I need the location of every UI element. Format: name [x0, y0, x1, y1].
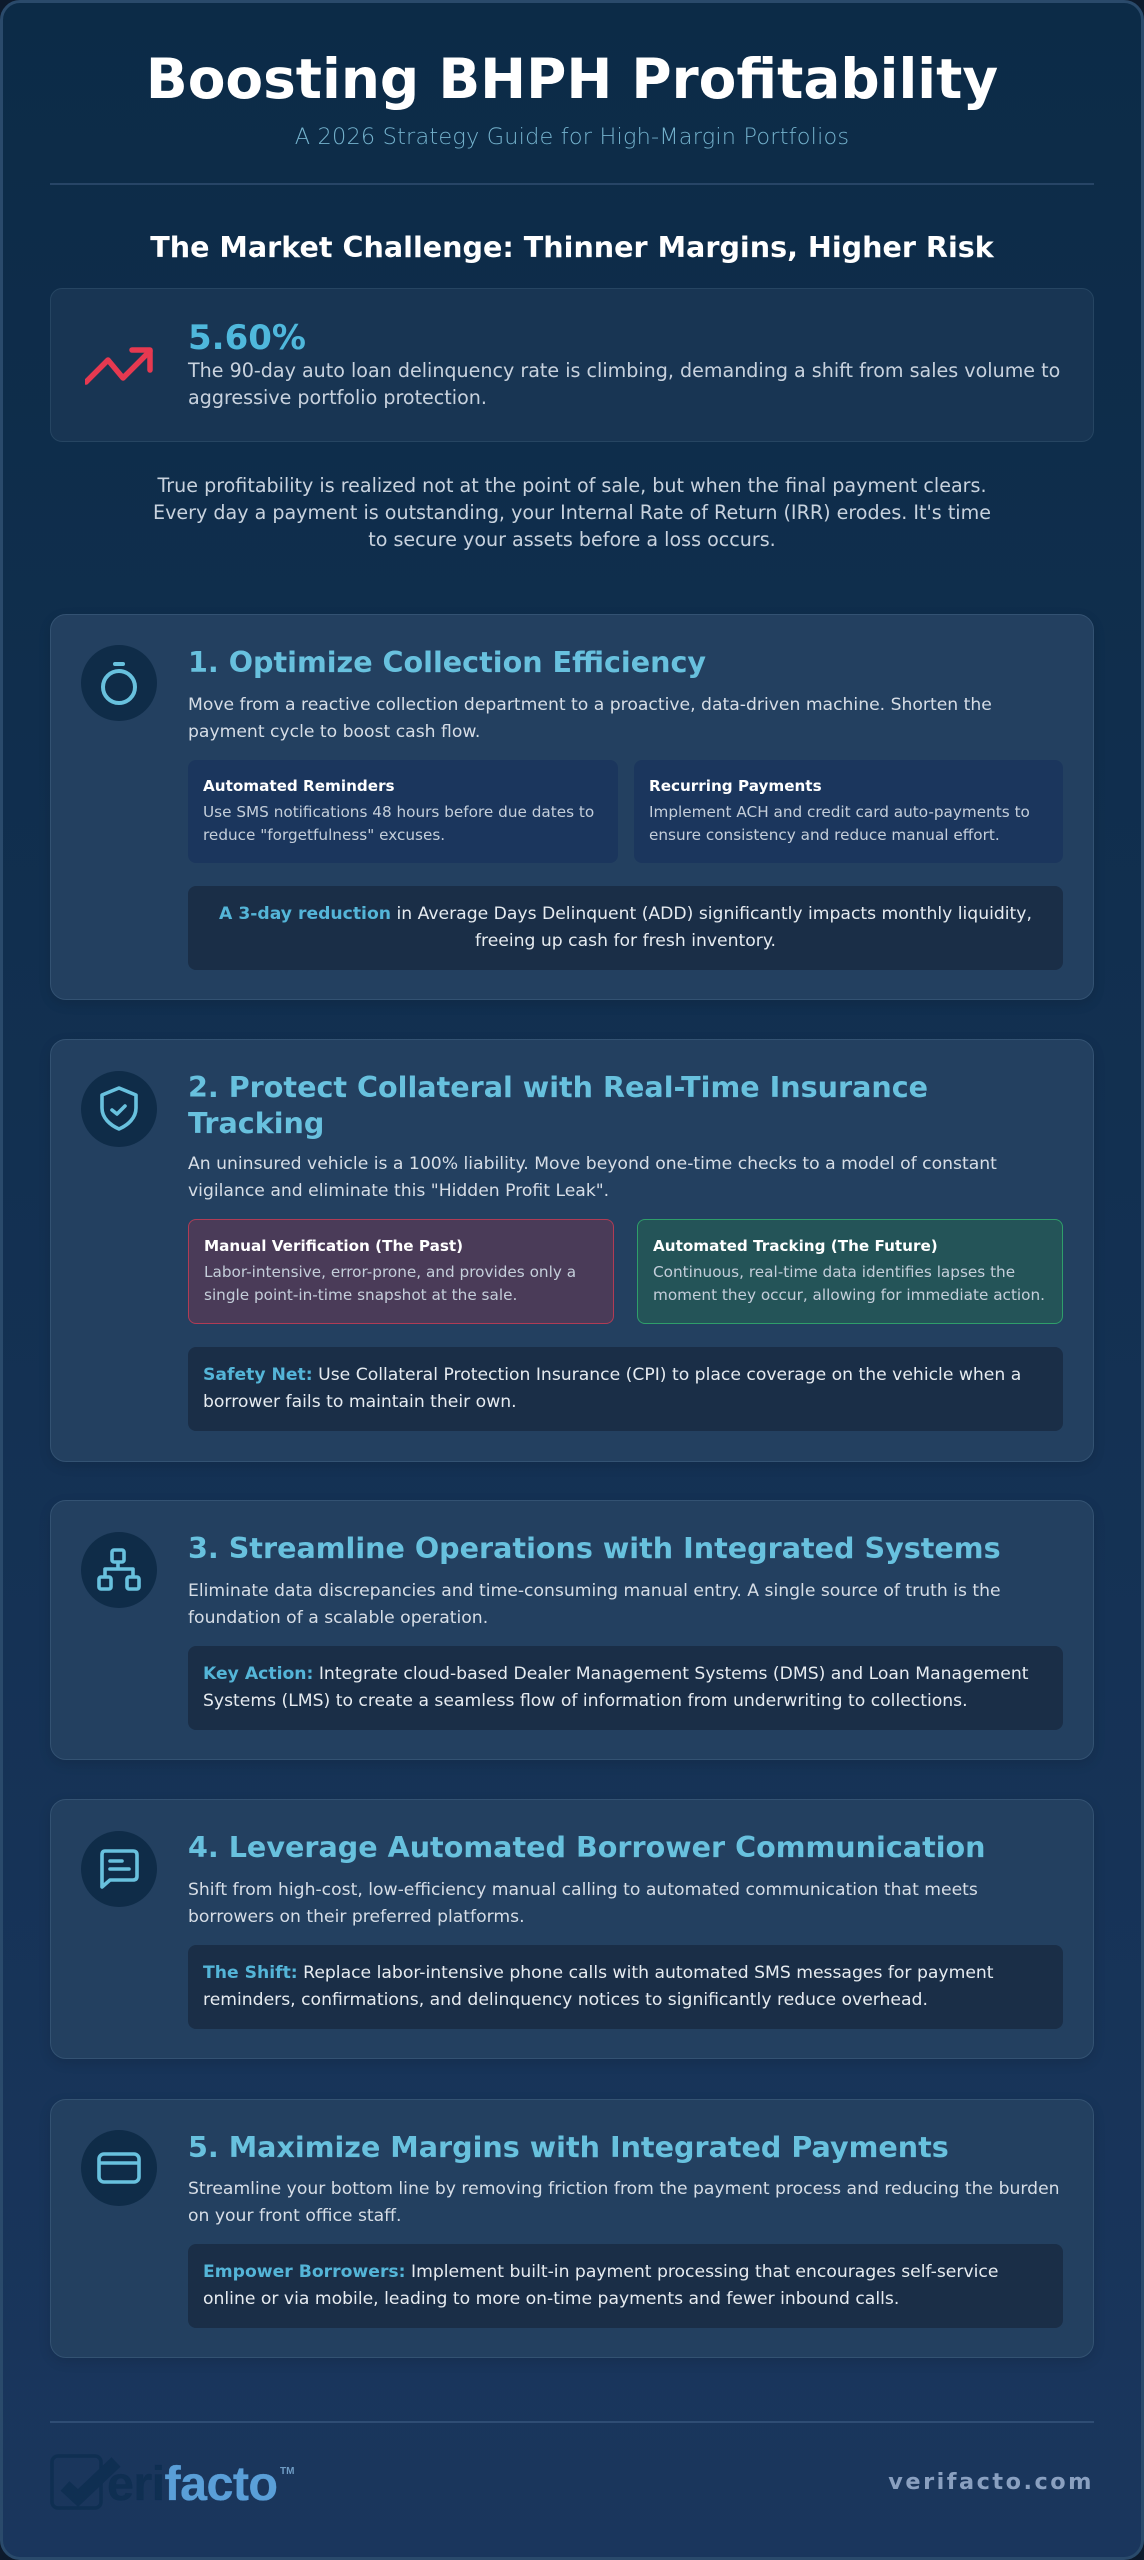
callout: key action	[188, 1646, 1063, 1730]
callout: empower borrowers	[188, 2244, 1063, 2328]
step 2 heading: Tracking	[188, 1106, 324, 1140]
icon: chat bubble	[81, 1831, 157, 1907]
panel: step 2	[50, 1039, 1094, 1462]
step 4 description	[188, 1880, 978, 1927]
step 4 description: borrowers on their preferred platforms.	[188, 1907, 525, 1927]
box: manual verification: single point-in-time snapshot at the sale.	[204, 1286, 517, 1304]
icon: stopwatch	[81, 645, 157, 721]
step 1 description	[188, 695, 992, 742]
step 1 description: payment cycle to boost cash flow.	[188, 722, 480, 742]
callout: safety net: borrower fails to maintain their own.	[203, 1392, 517, 1412]
step 2 heading: 2. Protect Collateral with Real-Time Insurance	[188, 1070, 928, 1104]
callout: empower borrowers: online or via mobile, leading to more on-time payments and fewer inbound calls.	[203, 2289, 899, 2309]
step 3 heading: 3. Streamline Operations with Integrated Systems	[188, 1531, 1001, 1565]
stat description: aggressive portfolio protection.	[188, 386, 487, 409]
step 4 description: Shift from high-cost, low-efficiency manual calling to automated communication that meets	[188, 1880, 978, 1900]
callout: the shift	[188, 1945, 1063, 2029]
box: manual verification: Manual Verification (The Past)	[204, 1237, 463, 1255]
logo: verifacto	[50, 2454, 294, 2511]
step 4 heading: 4. Leverage Automated Borrower Communication	[188, 1830, 986, 1864]
callout: key action: Key Action: Integrate cloud-based Dealer Management Systems (DMS) and Loan Management	[203, 1664, 1028, 1684]
panel: step 3	[50, 1500, 1094, 1760]
step 1 heading: 1. Optimize Collection Efficiency	[188, 645, 706, 679]
icon: trending up arrow	[85, 347, 153, 385]
footer url: verifacto.com	[888, 2469, 1094, 2495]
box: automated tracking: Automated Tracking (The Future)	[653, 1237, 938, 1255]
intro paragraph: to secure your assets before a loss occurs.	[368, 528, 776, 551]
heading: market challenge: The Market Challenge: Thinner Margins, Higher Risk	[150, 230, 994, 264]
box: manual verification: Labor-intensive, error-prone, and provides only a	[204, 1263, 576, 1281]
step 3 description	[188, 1581, 1001, 1628]
intro paragraph: True profitability is realized not at the point of sale, but when the final payment clears.	[157, 474, 987, 497]
stat value: 5.60%	[188, 318, 306, 358]
box: automated reminders	[188, 760, 618, 863]
stat description	[188, 359, 1060, 409]
logo wordmark: erifacto	[107, 2457, 277, 2511]
box: automated reminders: Automated Reminders	[203, 777, 395, 795]
callout: the shift: The Shift: Replace labor-intensive phone calls with automated SMS messages for payment	[203, 1963, 994, 1983]
panel: step 1	[50, 614, 1094, 1000]
box: manual verification	[188, 1219, 614, 1324]
title: Boosting BHPH Profitability	[146, 47, 998, 111]
step 2 description: vigilance and eliminate this "Hidden Profit Leak".	[188, 1181, 609, 1201]
step 2 description: An uninsured vehicle is a 100% liability. Move beyond one-time checks to a model of constant	[188, 1154, 997, 1174]
box: automated tracking: Continuous, real-time data identifies lapses the	[653, 1263, 1015, 1281]
box: recurring payments	[634, 760, 1063, 863]
subtitle: A 2026 Strategy Guide for High-Margin Portfolios	[295, 124, 849, 150]
callout: safety net: Safety Net: Use Collateral Protection Insurance (CPI) to place coverage on the vehicle when a	[203, 1365, 1021, 1385]
callout: 3-day reduction	[188, 886, 1063, 970]
callout: safety net	[188, 1347, 1063, 1431]
callout: the shift: reminders, confirmations, and delinquency notices to significantly reduce overhead.	[203, 1990, 928, 2010]
panel: step 5	[50, 2099, 1094, 2358]
intro paragraph	[153, 474, 991, 551]
panel: stat card	[50, 288, 1094, 442]
step 5 heading: 5. Maximize Margins with Integrated Payments	[188, 2130, 949, 2164]
callout: key action: Systems (LMS) to create a seamless flow of information from underwriting to collections.	[203, 1691, 968, 1711]
callout: 3-day reduction: A 3-day reduction in Average Days Delinquent (ADD) significantly impacts monthly liquidity,	[219, 904, 1032, 924]
box: recurring payments: ensure consistency and reduce manual effort.	[649, 826, 1000, 844]
intro paragraph: Every day a payment is outstanding, your Internal Rate of Return (IRR) erodes. It's time	[153, 501, 991, 524]
icon: shield check	[81, 1071, 157, 1147]
trademark: TM	[280, 2466, 294, 2477]
step 5 description	[188, 2179, 1060, 2226]
panel: step 4	[50, 1799, 1094, 2059]
box: automated reminders: reduce "forgetfulness" excuses.	[203, 826, 445, 844]
callout: empower borrowers: Empower Borrowers: Implement built-in payment processing that encourages self-service	[203, 2262, 998, 2282]
step 5 description: on your front office staff.	[188, 2206, 401, 2226]
box: recurring payments: Recurring Payments	[649, 777, 822, 795]
step 5 description: Streamline your bottom line by removing friction from the payment process and reducing the burden	[188, 2179, 1060, 2199]
step 2 description	[188, 1154, 997, 1201]
step 1 description: Move from a reactive collection department to a proactive, data-driven machine. Shorten the	[188, 695, 992, 715]
box: recurring payments: Implement ACH and credit card auto-payments to	[649, 803, 1030, 821]
box: automated reminders: Use SMS notifications 48 hours before due dates to	[203, 803, 594, 821]
box: automated tracking: moment they occur, allowing for immediate action.	[653, 1286, 1045, 1304]
icon: logo checkbox	[50, 2454, 120, 2510]
stat description: The 90-day auto loan delinquency rate is climbing, demanding a shift from sales volume to	[188, 359, 1060, 382]
step 3 description: foundation of a scalable operation.	[188, 1608, 488, 1628]
icon: network hierarchy	[81, 1532, 157, 1608]
step 3 description: Eliminate data discrepancies and time-consuming manual entry. A single source of truth is the	[188, 1581, 1001, 1601]
icon: credit card	[81, 2130, 157, 2206]
box: automated tracking	[637, 1219, 1063, 1324]
step 2 heading	[188, 1070, 928, 1140]
callout: 3-day reduction: freeing up cash for fresh inventory.	[475, 931, 776, 951]
